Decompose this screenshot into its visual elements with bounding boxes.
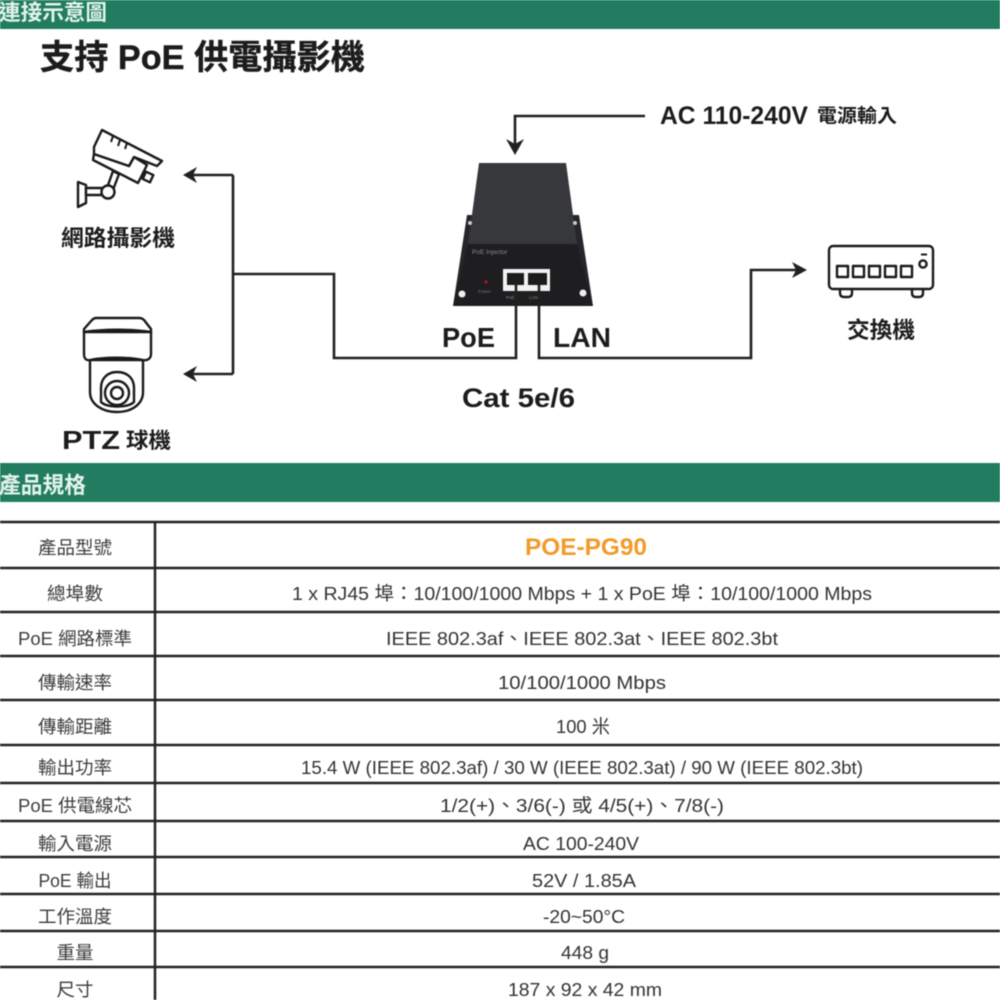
row: distance — [38, 716, 610, 737]
row: weight: 448 g — [561, 942, 609, 963]
row: output power: 輸出功率 — [38, 758, 112, 778]
device: PoE injector: PoE — [506, 295, 515, 300]
row: PoE standard — [18, 628, 778, 649]
row: total ports — [47, 583, 872, 604]
row: size — [56, 979, 662, 1000]
label: switch: 交換機 — [847, 317, 915, 343]
row: model: 產品型號 — [38, 538, 112, 558]
label: PoE port: PoE — [442, 322, 495, 353]
section banner: specifications: 產品規格 — [0, 472, 86, 498]
section banner: connection diagram — [0, 0, 1000, 29]
row: PoE standard: PoE 網路標準 — [18, 629, 132, 649]
row: PoE output: PoE 輸出 — [38, 871, 112, 891]
row: input power — [38, 833, 640, 854]
row: PoE standard: IEEE 802.3af、IEEE 802.3at、IEEE 802.3bt — [386, 628, 778, 649]
row: distance: 傳輸距離 — [38, 717, 112, 737]
row: PoE output: 52V / 1.85A — [532, 870, 637, 891]
label: cable type: Cat 5e/6 — [462, 383, 575, 413]
label: PTZ camera: 球機 — [126, 429, 171, 453]
label: PTZ camera: PTZ — [62, 425, 120, 455]
device: PoE injector — [453, 163, 593, 306]
label: AC power input — [660, 102, 897, 130]
row: transfer rate — [38, 672, 666, 693]
icon: network camera — [78, 130, 162, 207]
row: weight: 重量 — [56, 943, 94, 963]
row: PoE pins: PoE 供電線芯 — [18, 796, 132, 816]
icon: PTZ dome camera — [84, 318, 151, 412]
connector: LAN cable to switch — [539, 262, 807, 358]
connector: PoE cable to cameras — [183, 167, 516, 382]
row: operating temperature: -20~50°C — [543, 906, 625, 927]
section banner: specifications — [0, 463, 1000, 502]
row: transfer rate: 10/100/1000 Mbps — [498, 672, 666, 693]
row: output power: 15.4 W (IEEE 802.3af) / 30 W (IEEE 802.3at) / 90 W (IEEE 802.3bt) — [301, 757, 863, 778]
spec table — [0, 522, 1000, 1000]
title: 支持 PoE 供電攝影機 — [40, 39, 365, 77]
label: PTZ camera — [62, 425, 171, 455]
row: model: POE-PG90 — [525, 534, 647, 561]
row: input power: 輸入電源 — [38, 834, 112, 854]
device: PoE injector: PoE Injector — [472, 249, 508, 256]
section banner: connection diagram: 連接示意圖 — [0, 1, 107, 25]
label: LAN port: LAN — [553, 322, 611, 353]
row: PoE pins — [18, 795, 724, 816]
label: AC power input: 電源輸入 — [817, 105, 897, 127]
row: PoE pins: 1/2(+)、3/6(-) 或 4/5(+)、7/8(-) — [440, 795, 724, 816]
row: operating temperature: 工作溫度 — [38, 907, 112, 927]
device: PoE injector: LAN — [529, 295, 538, 300]
row: distance: 100 米 — [556, 716, 610, 737]
label: network camera: 網路攝影機 — [61, 226, 175, 251]
connector: AC power arrow — [506, 116, 645, 155]
device: PoE injector: Power — [478, 289, 491, 294]
row: size: 187 x 92 x 42 mm — [508, 979, 662, 1000]
row: PoE output — [38, 870, 637, 891]
row: size: 尺寸 — [56, 980, 94, 1000]
icon: network switch — [829, 246, 933, 297]
row: weight — [56, 942, 609, 963]
row: total ports: 1 x RJ45 埠：10/100/1000 Mbps + 1 x PoE 埠：10/100/1000 Mbps — [292, 583, 872, 604]
row: model — [38, 534, 647, 561]
row: transfer rate: 傳輸速率 — [38, 673, 112, 693]
row: output power — [38, 757, 863, 778]
row: input power: AC 100-240V — [523, 833, 640, 854]
label: AC power input: AC 110-240V — [660, 102, 808, 130]
row: total ports: 總埠數 — [47, 584, 103, 604]
row: operating temperature — [38, 906, 625, 927]
